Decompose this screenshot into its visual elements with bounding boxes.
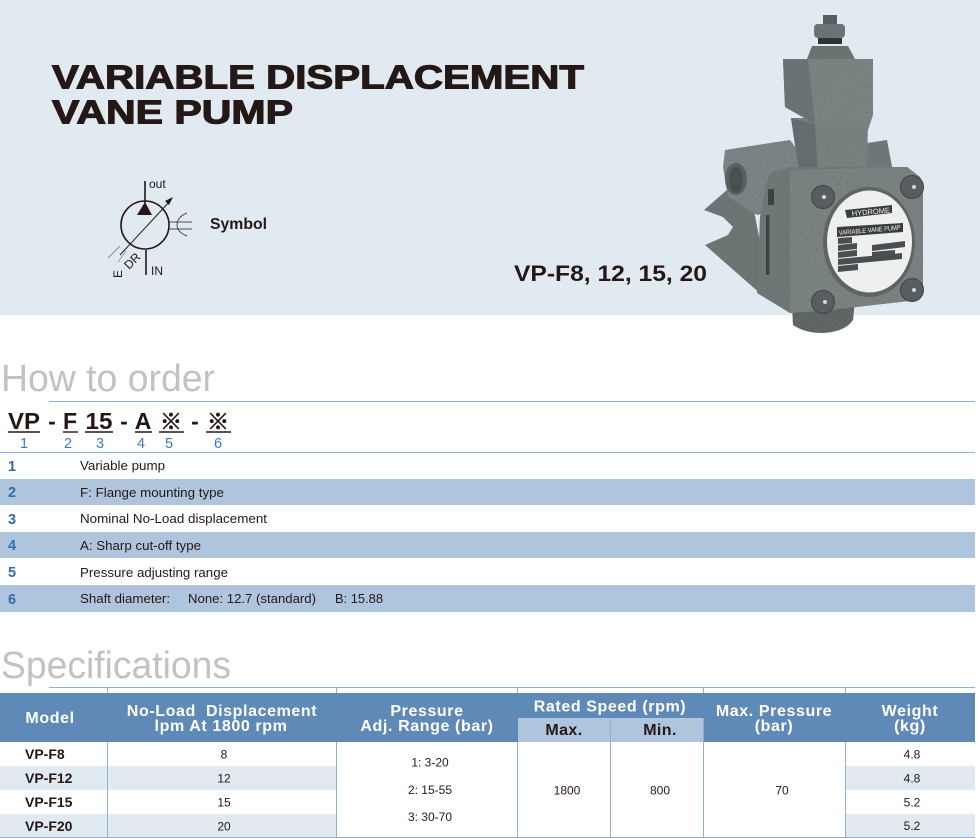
table header labels: Weight: [882, 703, 938, 720]
order code: ※: [207, 404, 229, 436]
bolts: [812, 176, 924, 314]
table model names: VP-F8: [25, 746, 65, 762]
title: VARIABLE DISPLACEMENT: [52, 58, 584, 96]
order code: -: [191, 408, 199, 434]
order code: F: [63, 408, 77, 434]
table header labels: [25, 698, 938, 735]
table values: 20: [217, 820, 231, 834]
port opening: [725, 163, 747, 195]
table header labels: Model: [25, 710, 75, 727]
order code: -: [120, 408, 128, 434]
order code: 4: [137, 436, 145, 452]
order code: 6: [214, 436, 222, 452]
table header labels: No-Load Displacement: [127, 703, 317, 720]
specifications table: [0, 687, 975, 838]
header banner: [0, 0, 980, 315]
icon: pump photo illustration: [704, 15, 924, 333]
table values: 2: 15-55: [408, 783, 452, 797]
order legend table: 3: [8, 512, 16, 528]
table values: 12: [217, 772, 231, 786]
order legend table: F: Flange mounting type: [80, 485, 224, 500]
icon: hydraulic pump symbol: E: [111, 270, 125, 278]
table values: 8: [221, 748, 228, 762]
order legend table: A: Sharp cut-off type: [80, 538, 201, 553]
icon: pump photo illustration: HYDROME: [851, 206, 890, 218]
icon: hydraulic pump symbol: out: [149, 177, 166, 191]
table values: 4.8: [904, 772, 921, 786]
order code: 3: [96, 436, 104, 452]
table model names: VP-F20: [25, 818, 73, 834]
order legend table: Shaft diameter:: [80, 591, 170, 606]
table header labels: Adj. Range (bar): [360, 718, 494, 735]
heading: specifications: Specifications: [1, 645, 231, 687]
icon: hydraulic pump symbol: DR: [121, 250, 144, 272]
table model names: VP-F12: [25, 770, 73, 786]
table header labels: lpm At 1800 rpm: [155, 718, 287, 735]
icon: hydraulic pump symbol: IN: [151, 264, 163, 278]
table values: 15: [217, 796, 231, 810]
order legend table: 4: [8, 538, 16, 554]
nameplate: [823, 187, 915, 297]
table model names: VP-F15: [25, 794, 73, 810]
order legend table: Variable pump: [80, 458, 165, 473]
title: [52, 58, 584, 130]
order code: VP: [8, 408, 40, 434]
specifications table: Min.: [643, 722, 677, 739]
order code: 15: [86, 408, 113, 434]
order legend table: 6: [8, 592, 16, 608]
order code: 1: [20, 436, 28, 452]
table values: 5.2: [904, 796, 921, 810]
order code: [8, 404, 231, 452]
left port housing: [723, 140, 805, 215]
top nut and stud: [807, 46, 855, 59]
specifications table: Max.: [545, 722, 583, 739]
model label: VP-F8, 12, 15, 20: [514, 261, 707, 286]
order legend table: 2: [8, 485, 16, 501]
heading: how to order: How to order: [1, 358, 215, 400]
table values: 3: 30-70: [408, 810, 452, 824]
order legend table: [0, 458, 975, 612]
order legend table: None: 12.7 (standard): [188, 591, 316, 606]
order code: ※: [160, 404, 182, 436]
bottom boss: [792, 300, 855, 333]
neck: [791, 118, 868, 178]
table values: 5.2: [904, 819, 921, 833]
top block: [783, 59, 873, 130]
order code: A: [135, 408, 151, 434]
symbol label: Symbol: [210, 216, 267, 233]
table values: [217, 748, 921, 834]
table values: 1: 3-20: [411, 756, 449, 770]
foot: [704, 190, 762, 295]
order legend table: B: 15.88: [335, 591, 383, 606]
table header labels: Pressure: [390, 703, 464, 720]
table model names: [25, 746, 73, 834]
table header labels: (bar): [755, 718, 793, 735]
order code: -: [48, 408, 56, 434]
order legend table: 5: [8, 565, 16, 581]
rear block: [867, 140, 892, 172]
slot marks: [766, 215, 770, 275]
order legend table: Nominal No-Load displacement: [80, 511, 267, 526]
table header labels: Max. Pressure: [716, 703, 832, 720]
table header labels: Rated Speed (rpm): [534, 698, 686, 716]
main body: [757, 167, 923, 313]
order legend table: Pressure adjusting range: [80, 565, 228, 580]
table values: 70: [775, 784, 789, 798]
icon: hydraulic pump symbol: [108, 177, 192, 278]
icon: pump photo illustration: VARIABLE VANE PUMP: [839, 225, 901, 237]
table values: 800: [650, 784, 670, 798]
order code: 2: [64, 436, 72, 452]
table values: 1800: [554, 784, 581, 798]
order code: 5: [165, 436, 173, 452]
table values: 4.8: [904, 748, 921, 762]
title: VANE PUMP: [52, 94, 293, 130]
table header labels: (kg): [894, 718, 926, 735]
order legend table: 1: [8, 459, 16, 475]
